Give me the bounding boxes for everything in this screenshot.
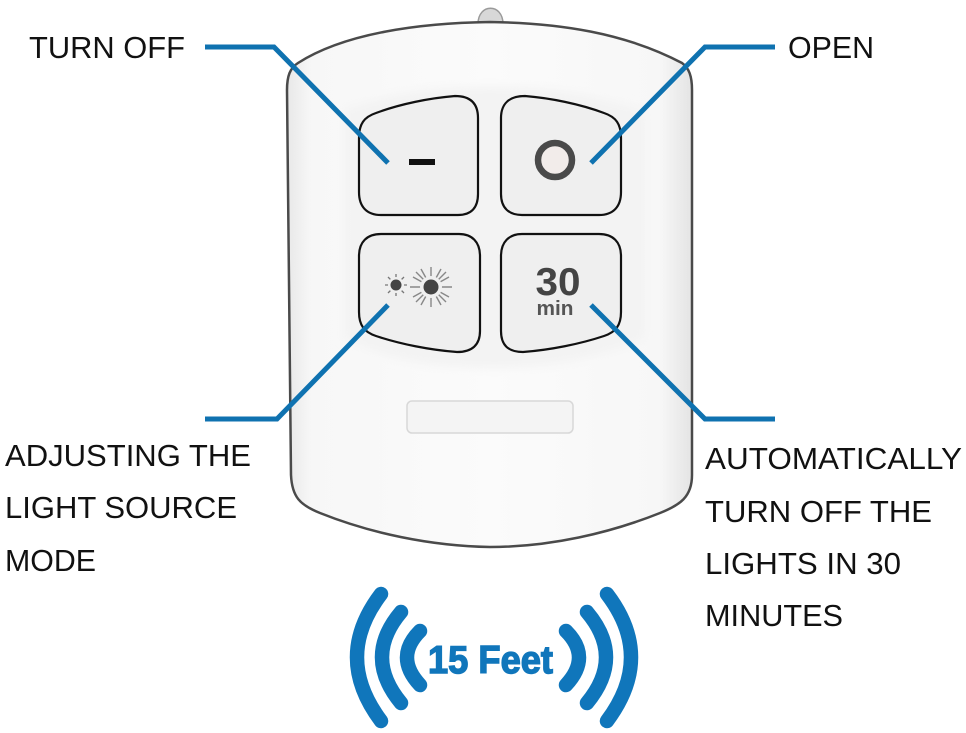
icon: 15 feet wireless range	[357, 594, 631, 721]
callout line: turn off	[205, 47, 388, 163]
label: automatically turn off: AUTOMATICALLY	[705, 442, 962, 476]
icon: small sun	[385, 274, 407, 296]
label: open: OPEN	[788, 31, 874, 65]
slot	[407, 401, 573, 433]
remote control	[287, 8, 692, 547]
label: adjusting the light source mode: LIGHT SOURCE	[5, 491, 237, 525]
label: adjusting the light source mode: MODE	[5, 544, 96, 578]
callout line: open	[591, 47, 775, 163]
button: 30 min: min	[536, 298, 574, 320]
label: automatically turn off: MINUTES	[705, 599, 843, 633]
button: 30 min	[501, 234, 621, 352]
label: turn off: TURN OFF	[29, 31, 185, 65]
icon: indicator LED	[478, 8, 503, 24]
button: circle	[501, 96, 621, 215]
callout line: adjusting light	[205, 305, 388, 419]
callout line: auto off	[591, 305, 775, 419]
button panel recess	[345, 87, 645, 368]
label: adjusting the light source mode: ADJUSTING THE	[5, 439, 251, 473]
label: automatically turn off: LIGHTS IN 30	[705, 547, 901, 581]
label: automatically turn off: TURN OFF THE	[705, 495, 932, 529]
remote body	[287, 22, 692, 547]
icon: large sun	[410, 267, 452, 307]
range text: 15 Feet	[428, 639, 553, 682]
label: adjusting the light source mode	[5, 439, 251, 578]
label: automatically turn off	[705, 442, 962, 633]
button: brightness	[359, 234, 480, 352]
button: 30 min: 30	[536, 261, 580, 304]
button: minus	[359, 96, 478, 215]
